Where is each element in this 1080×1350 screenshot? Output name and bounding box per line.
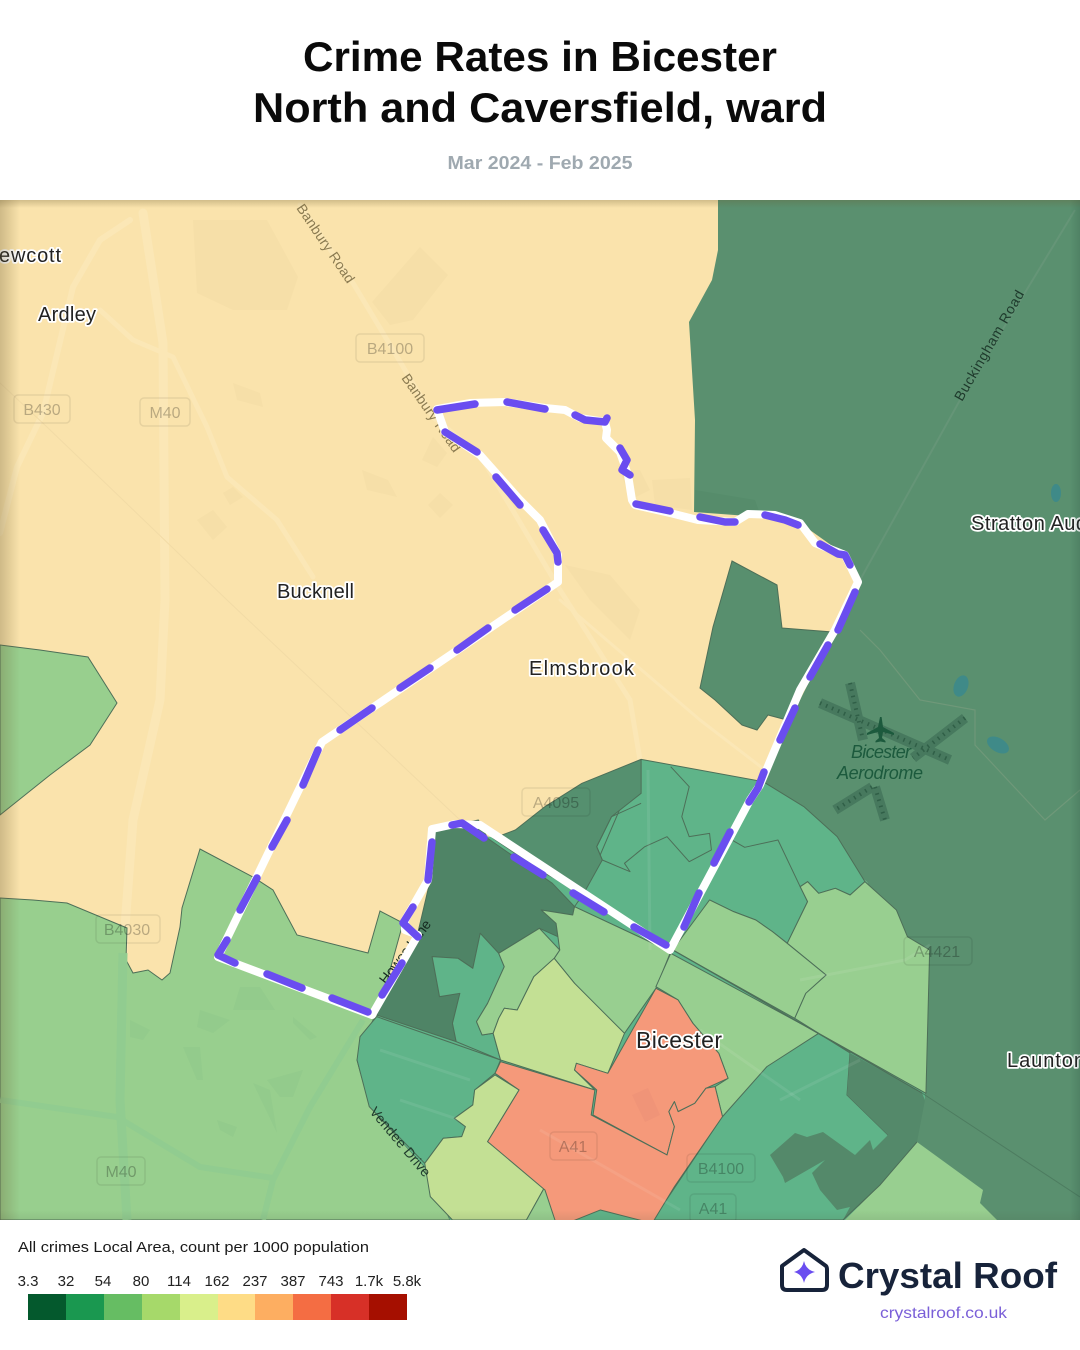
ward: salmon town centre north — [575, 988, 728, 1155]
ward: north-east light — [673, 900, 826, 1018]
area: darker field band — [696, 512, 700, 513]
road labels: Banbury Road — [399, 371, 464, 455]
ward: inner west light — [477, 928, 560, 1035]
icon: plane — [867, 717, 894, 742]
legend scale labels: 387 — [280, 1273, 306, 1290]
ward: south-west medium — [357, 1017, 501, 1163]
icon: aerodrome runways — [820, 683, 965, 820]
area: dark green pocket, Caversfield — [700, 561, 832, 730]
logo url: crystalroof.co.uk — [880, 1305, 1008, 1322]
road shields: A41 — [699, 1201, 727, 1218]
road labels: Vendee Drive — [367, 1104, 434, 1180]
area: faint diagonal in dark green — [922, 1093, 1080, 1197]
legend title: All crimes Local Area, count per 1000 population — [18, 1239, 369, 1256]
area: south-west light green — [0, 849, 450, 1220]
logo wordmark: Crystal Roof — [838, 1255, 1058, 1296]
area: town backing — [372, 812, 925, 1220]
area: west green blob — [0, 645, 117, 815]
legend scale labels: 3.3 — [18, 1273, 38, 1290]
ward: east light — [787, 882, 930, 1093]
title: Crime Rates in Bicester — [303, 33, 777, 80]
place labels: Bicester — [636, 1027, 722, 1053]
ward: salmon town centre south — [488, 1062, 723, 1223]
area: small ponds — [951, 484, 1061, 757]
ward: dark strip edge line — [843, 1142, 917, 1220]
legend scale labels: 1.7k — [355, 1273, 384, 1290]
legend scale labels: 5.8k — [393, 1273, 422, 1290]
road shields: M40 — [149, 405, 181, 422]
place labels: Elmsbrook — [529, 658, 635, 680]
area: green land patches — [130, 987, 317, 1137]
boundary: purple dashes — [218, 402, 855, 1012]
ward: long diagonal boundary — [673, 950, 922, 1093]
legend scale labels: 114 — [167, 1273, 191, 1290]
legend scale labels: 237 — [242, 1273, 268, 1290]
area: town faint streets — [380, 770, 930, 1210]
legend scale labels: 80 — [133, 1273, 149, 1290]
logo: Crystal Roof — [782, 1250, 1058, 1322]
legend scale labels: 54 — [95, 1273, 111, 1290]
ward: bottom light — [526, 1189, 554, 1220]
road shields: M40 — [105, 1164, 137, 1181]
ward: north-west darkest — [377, 820, 575, 1042]
road shields: B4030 — [104, 922, 150, 939]
road labels: Howes Lane — [376, 916, 434, 987]
road shields: B430 — [23, 402, 61, 419]
ward: lime centre — [493, 958, 624, 1090]
road labels — [294, 201, 1027, 1180]
aerodrome label: Aerodrome — [836, 763, 923, 783]
date range subtitle: Mar 2024 - Feb 2025 — [448, 153, 632, 173]
road shields — [14, 334, 972, 1222]
ward: north — [575, 759, 865, 952]
title: North and Caversfield, ward — [253, 84, 827, 131]
road shields: A4095 — [533, 795, 579, 812]
ward: central light — [541, 907, 671, 1033]
road labels: Banbury Road — [294, 201, 358, 286]
area: green roads — [0, 953, 266, 1220]
road shields: A41 — [559, 1139, 587, 1156]
ward: east-centre light — [656, 953, 819, 1117]
place labels — [0, 245, 1080, 1072]
place labels: Bucknell — [277, 581, 354, 603]
area: salmon darker building patch — [632, 1088, 660, 1122]
ward: south-east dark band and patch — [770, 1053, 925, 1220]
ward: north dark — [493, 759, 641, 893]
map edge shading — [0, 200, 1080, 1220]
area: faint land patches — [193, 220, 692, 640]
ward: south-west lime — [425, 1075, 545, 1220]
place labels: ewcott — [0, 245, 61, 267]
road shields: B4100 — [698, 1161, 744, 1178]
area: Buckingham Road line — [860, 210, 1075, 580]
area: low-rate dark green, east — [689, 200, 1080, 1220]
area: Bicester town wards — [357, 759, 930, 1223]
road shields: A4421 — [914, 944, 960, 961]
road labels: Buckingham Road — [951, 287, 1027, 404]
place labels: Ardley — [38, 304, 96, 326]
ward: west medium — [456, 954, 504, 1060]
legend colour bar — [28, 1294, 407, 1320]
boundary: white outline — [218, 402, 858, 1015]
legend scale labels — [18, 1273, 422, 1290]
area: footpath line — [860, 630, 1080, 820]
choropleth map — [0, 200, 1080, 1223]
icon: house with star — [782, 1250, 827, 1290]
legend — [18, 1239, 422, 1320]
area: faint roads — [0, 205, 765, 953]
ward: south-east light corner — [845, 1142, 997, 1220]
road shields: B4100 — [367, 341, 413, 358]
aerodrome label — [836, 742, 923, 783]
aerodrome label: Bicester — [851, 742, 912, 762]
ward boundary inside north — [597, 767, 711, 872]
legend scale labels: 743 — [318, 1273, 344, 1290]
title — [253, 33, 827, 131]
legend scale labels: 32 — [58, 1273, 74, 1290]
ward: south-east medium — [653, 1033, 888, 1220]
legend scale labels: 162 — [204, 1273, 230, 1290]
ward boundary — [218, 402, 858, 1015]
